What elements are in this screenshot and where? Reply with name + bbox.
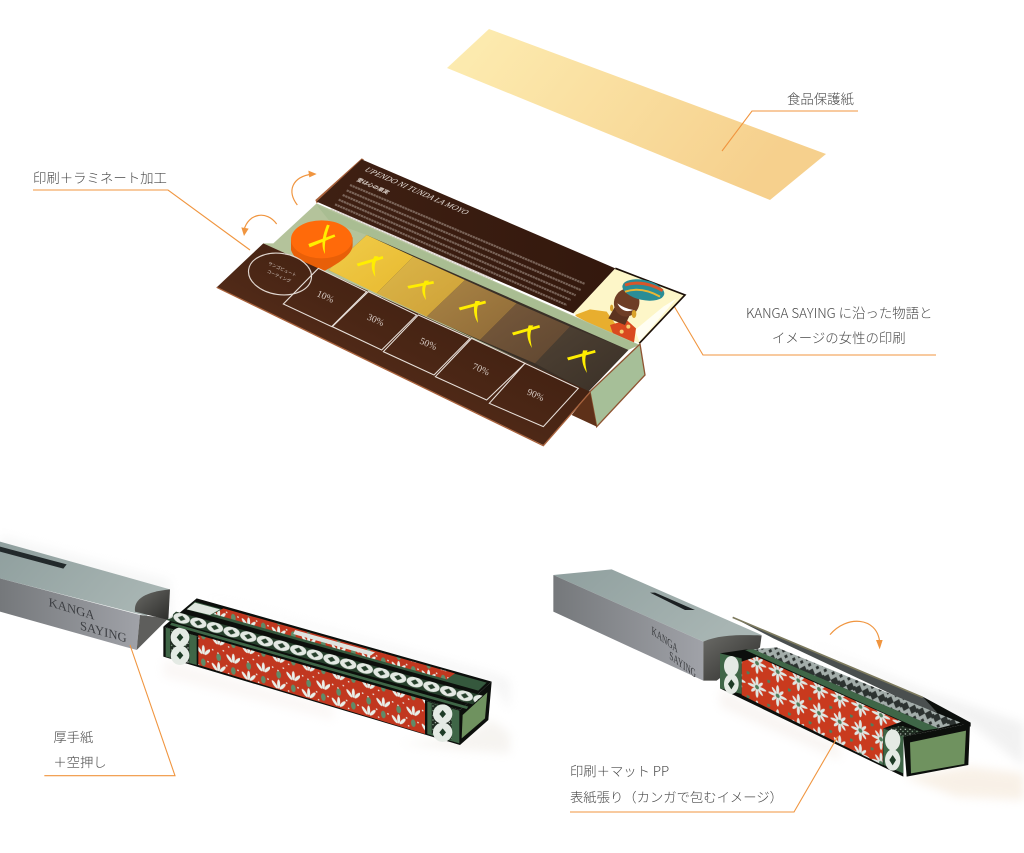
box end face xyxy=(462,692,487,738)
patterned box xyxy=(720,647,970,777)
chain band xyxy=(167,612,483,704)
label: lamination xyxy=(33,167,250,250)
orange round chocolate xyxy=(291,220,353,271)
box lid with story text xyxy=(315,158,615,313)
front flap with percentages xyxy=(217,243,590,446)
70% cell xyxy=(435,338,525,400)
embossed sleeve text xyxy=(652,625,696,682)
50% cell: 50% xyxy=(418,336,438,353)
70% cell: 70% xyxy=(470,361,491,378)
arrow: flap opens xyxy=(241,215,277,236)
leader and label: print with matte PP xyxy=(570,737,838,812)
box end face xyxy=(910,731,966,773)
10% cell: 10% xyxy=(315,289,336,306)
left end motif xyxy=(166,628,197,665)
arrow: wrap closes xyxy=(830,621,883,649)
grey chain band xyxy=(753,647,961,728)
10% cell xyxy=(283,268,367,327)
coating circle: サンゴビュート xyxy=(267,260,298,279)
right end motif xyxy=(883,726,922,773)
label: food protection paper: 食品保護紙 xyxy=(787,88,854,108)
chocolate tablets by cocoa percentage xyxy=(291,220,628,392)
tray end face xyxy=(572,344,645,427)
label: story and woman print: KANGA SAYING に沿った物語と xyxy=(746,302,932,322)
embossed sleeve text: SAYING xyxy=(669,650,696,682)
yellow logo marks xyxy=(308,225,596,373)
grey sleeve xyxy=(0,542,170,650)
right end motif xyxy=(427,702,459,743)
panel: sleeve and wrapped box, right xyxy=(553,569,1024,812)
coating circle: コーティング xyxy=(266,268,293,285)
left end motif xyxy=(720,653,742,694)
soft shadow xyxy=(0,535,510,753)
embossed sleeve text: KANGA xyxy=(49,594,95,623)
coating circle xyxy=(246,249,314,299)
portrait panel xyxy=(573,268,685,343)
panel: open chocolate box xyxy=(217,158,685,446)
label: story and woman print xyxy=(674,302,936,355)
leader and label: thick paper with deboss: 厚手紙 xyxy=(53,727,93,746)
red front and top panel xyxy=(742,657,902,765)
embossed sleeve text: KANGA xyxy=(652,625,678,657)
leader and label: thick paper with deboss: ＋空押し xyxy=(53,752,107,771)
label: story and woman print: イメージの女性の印刷 xyxy=(772,327,906,347)
arrow: lid opens xyxy=(292,171,317,205)
soft shadow xyxy=(720,643,1024,800)
90% cell xyxy=(489,363,578,427)
lid body copy texture xyxy=(331,185,585,305)
leader and label: thick paper with deboss xyxy=(44,645,175,776)
top face bands xyxy=(187,602,487,691)
label: lamination: 印刷＋ラミネート加工 xyxy=(33,167,167,187)
leader and label: print with matte PP: 印刷＋マット PP xyxy=(570,761,669,780)
red front panel xyxy=(198,635,425,734)
grey sleeve xyxy=(553,569,762,682)
patterned box xyxy=(163,598,492,745)
panel: sleeve and wrapped box, left xyxy=(0,535,510,776)
label: food protection paper xyxy=(722,88,858,151)
lid title: UPENDO NI TUNDA LA MOYO xyxy=(363,166,471,216)
open wrap lid xyxy=(733,617,971,727)
tray interior xyxy=(263,203,640,392)
centre label strip xyxy=(293,630,375,656)
panel: food protection paper xyxy=(447,29,826,200)
30% cell xyxy=(332,292,417,350)
embossed sleeve text xyxy=(49,594,127,645)
embossed sleeve text: SAYING xyxy=(80,618,127,645)
leader and label: print with matte PP: 表紙張り（カンガで包むイメージ） xyxy=(570,787,783,806)
30% cell: 30% xyxy=(365,312,386,329)
90% cell: 90% xyxy=(525,387,546,404)
lid subtitle: 愛は心の果実 xyxy=(355,176,393,196)
50% cell xyxy=(383,315,470,375)
